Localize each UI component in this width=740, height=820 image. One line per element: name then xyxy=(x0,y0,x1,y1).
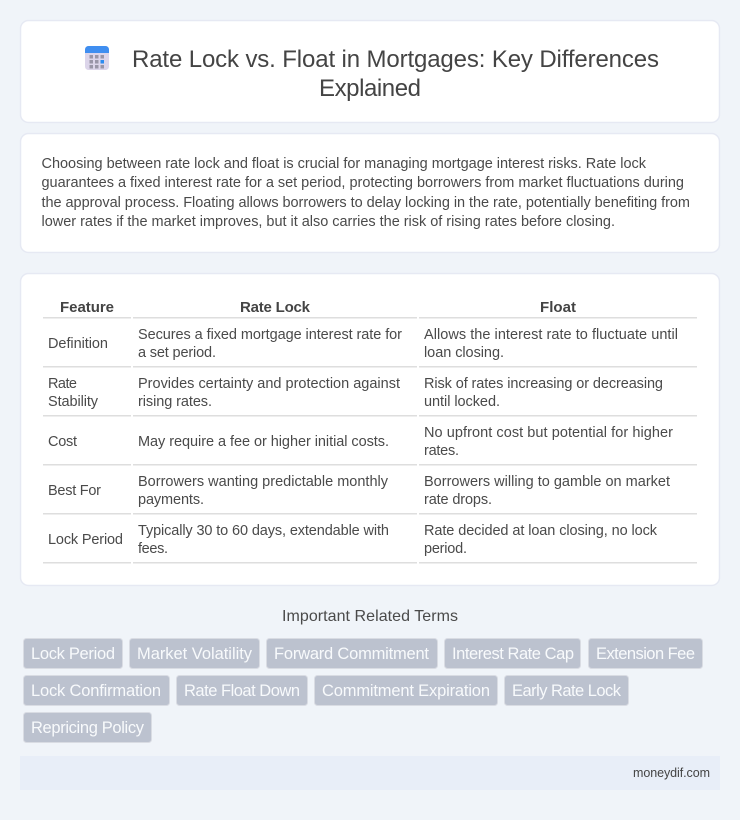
tag: rate float down xyxy=(176,676,308,706)
tag: interest rate cap xyxy=(444,638,580,668)
tag: lock confirmation xyxy=(24,676,170,706)
tag: lock period: Lock Period xyxy=(31,645,115,663)
footer xyxy=(20,756,720,790)
table row: lock period: fees. xyxy=(138,541,168,557)
table row: definition: Definition xyxy=(48,336,108,352)
table row: lock period: Lock Period xyxy=(48,532,123,548)
tag: commitment expiration: Commitment Expiration xyxy=(322,682,490,700)
table row: cost: rates. xyxy=(424,443,459,459)
table row: definition: loan closing. xyxy=(424,345,504,361)
table row: best for: rate drops. xyxy=(424,492,492,508)
table row: best for: Best For xyxy=(48,483,101,499)
table row: rate stability: Provides certainty and protection against xyxy=(138,376,400,392)
table row: cost: Cost xyxy=(48,434,77,450)
table row: lock period: Rate decided at loan closing, no lock xyxy=(424,523,658,539)
tag: repricing policy xyxy=(24,712,152,742)
panel: comparison table xyxy=(20,274,720,586)
table row: definition: Allows the interest rate to fluctuate until xyxy=(424,327,678,343)
icon: calendar xyxy=(85,46,109,70)
table header row xyxy=(43,299,697,318)
tag: extension fee xyxy=(588,638,702,668)
tag: forward commitment: Forward Commitment xyxy=(274,645,429,663)
tag: commitment expiration xyxy=(314,676,498,706)
table row: lock period: Typically 30 to 60 days, extendable with xyxy=(138,523,389,539)
panel: related term tags xyxy=(24,638,702,742)
title: Explained xyxy=(319,75,421,102)
panel: title header xyxy=(20,20,720,122)
table row: cost: May require a fee or higher initial costs. xyxy=(138,434,389,450)
table row: rate stability: Stability xyxy=(48,394,99,410)
tag: lock period xyxy=(24,638,122,668)
tag: repricing policy: Repricing Policy xyxy=(31,719,145,737)
tag: lock confirmation: Lock Confirmation xyxy=(31,682,161,700)
tag: interest rate cap: Interest Rate Cap xyxy=(452,645,574,663)
table row: rate stability xyxy=(43,376,697,416)
table row: rate stability: until locked. xyxy=(424,394,500,410)
table row: best for: Borrowers wanting predictable monthly xyxy=(138,474,389,490)
table row: best for: Borrowers willing to gamble on market xyxy=(424,474,670,490)
tag: early rate lock xyxy=(504,676,628,706)
tag: market volatility xyxy=(130,638,260,668)
title xyxy=(132,46,659,102)
footer: moneydif.com xyxy=(633,766,710,780)
table row: rate stability: rising rates. xyxy=(138,394,212,410)
tag: forward commitment xyxy=(266,638,438,668)
tag: market volatility: Market Volatility xyxy=(137,645,253,663)
tag: rate float down: Rate Float Down xyxy=(184,682,300,700)
text block: introduction paragraph: the approval process. Floating allows borrowers to delay locking in the rate, potentially benefiting from xyxy=(42,195,690,211)
table row: best for: payments. xyxy=(138,492,204,508)
table row: definition xyxy=(43,327,697,368)
text block: introduction paragraph: lower rates if the market improves, but it also carries the risk of rising rates before closing. xyxy=(42,214,615,230)
table header row: Rate Lock xyxy=(240,299,311,316)
table row: lock period: period. xyxy=(424,541,467,557)
table row: cost: No upfront cost but potential for higher xyxy=(424,425,673,441)
table row: rate stability: Rate xyxy=(48,376,77,392)
table row: rate stability: Risk of rates increasing or decreasing xyxy=(424,376,663,392)
tag: extension fee: Extension Fee xyxy=(596,645,695,663)
tag: early rate lock: Early Rate Lock xyxy=(512,682,622,700)
text block: introduction paragraph: guarantees a fixed interest rate for a set period, protecting borrowers from market fluctuations during xyxy=(42,175,684,191)
text block: introduction paragraph: Choosing between rate lock and float is crucial for managing mortgage interest risks. Rate lock xyxy=(42,156,647,172)
heading: important related terms: Important Related Terms xyxy=(282,608,458,625)
text block: introduction paragraph xyxy=(42,156,690,230)
table row: lock period xyxy=(43,523,697,564)
table row: definition: a set period. xyxy=(138,345,216,361)
table row: definition: Secures a fixed mortgage interest rate for xyxy=(138,327,402,343)
table row: best for xyxy=(43,474,697,514)
panel: introduction xyxy=(20,134,720,252)
table header row: Feature xyxy=(60,299,114,316)
table header row: Float xyxy=(540,299,576,316)
title: Rate Lock vs. Float in Mortgages: Key Differences xyxy=(132,46,659,73)
table row: cost xyxy=(43,425,697,466)
